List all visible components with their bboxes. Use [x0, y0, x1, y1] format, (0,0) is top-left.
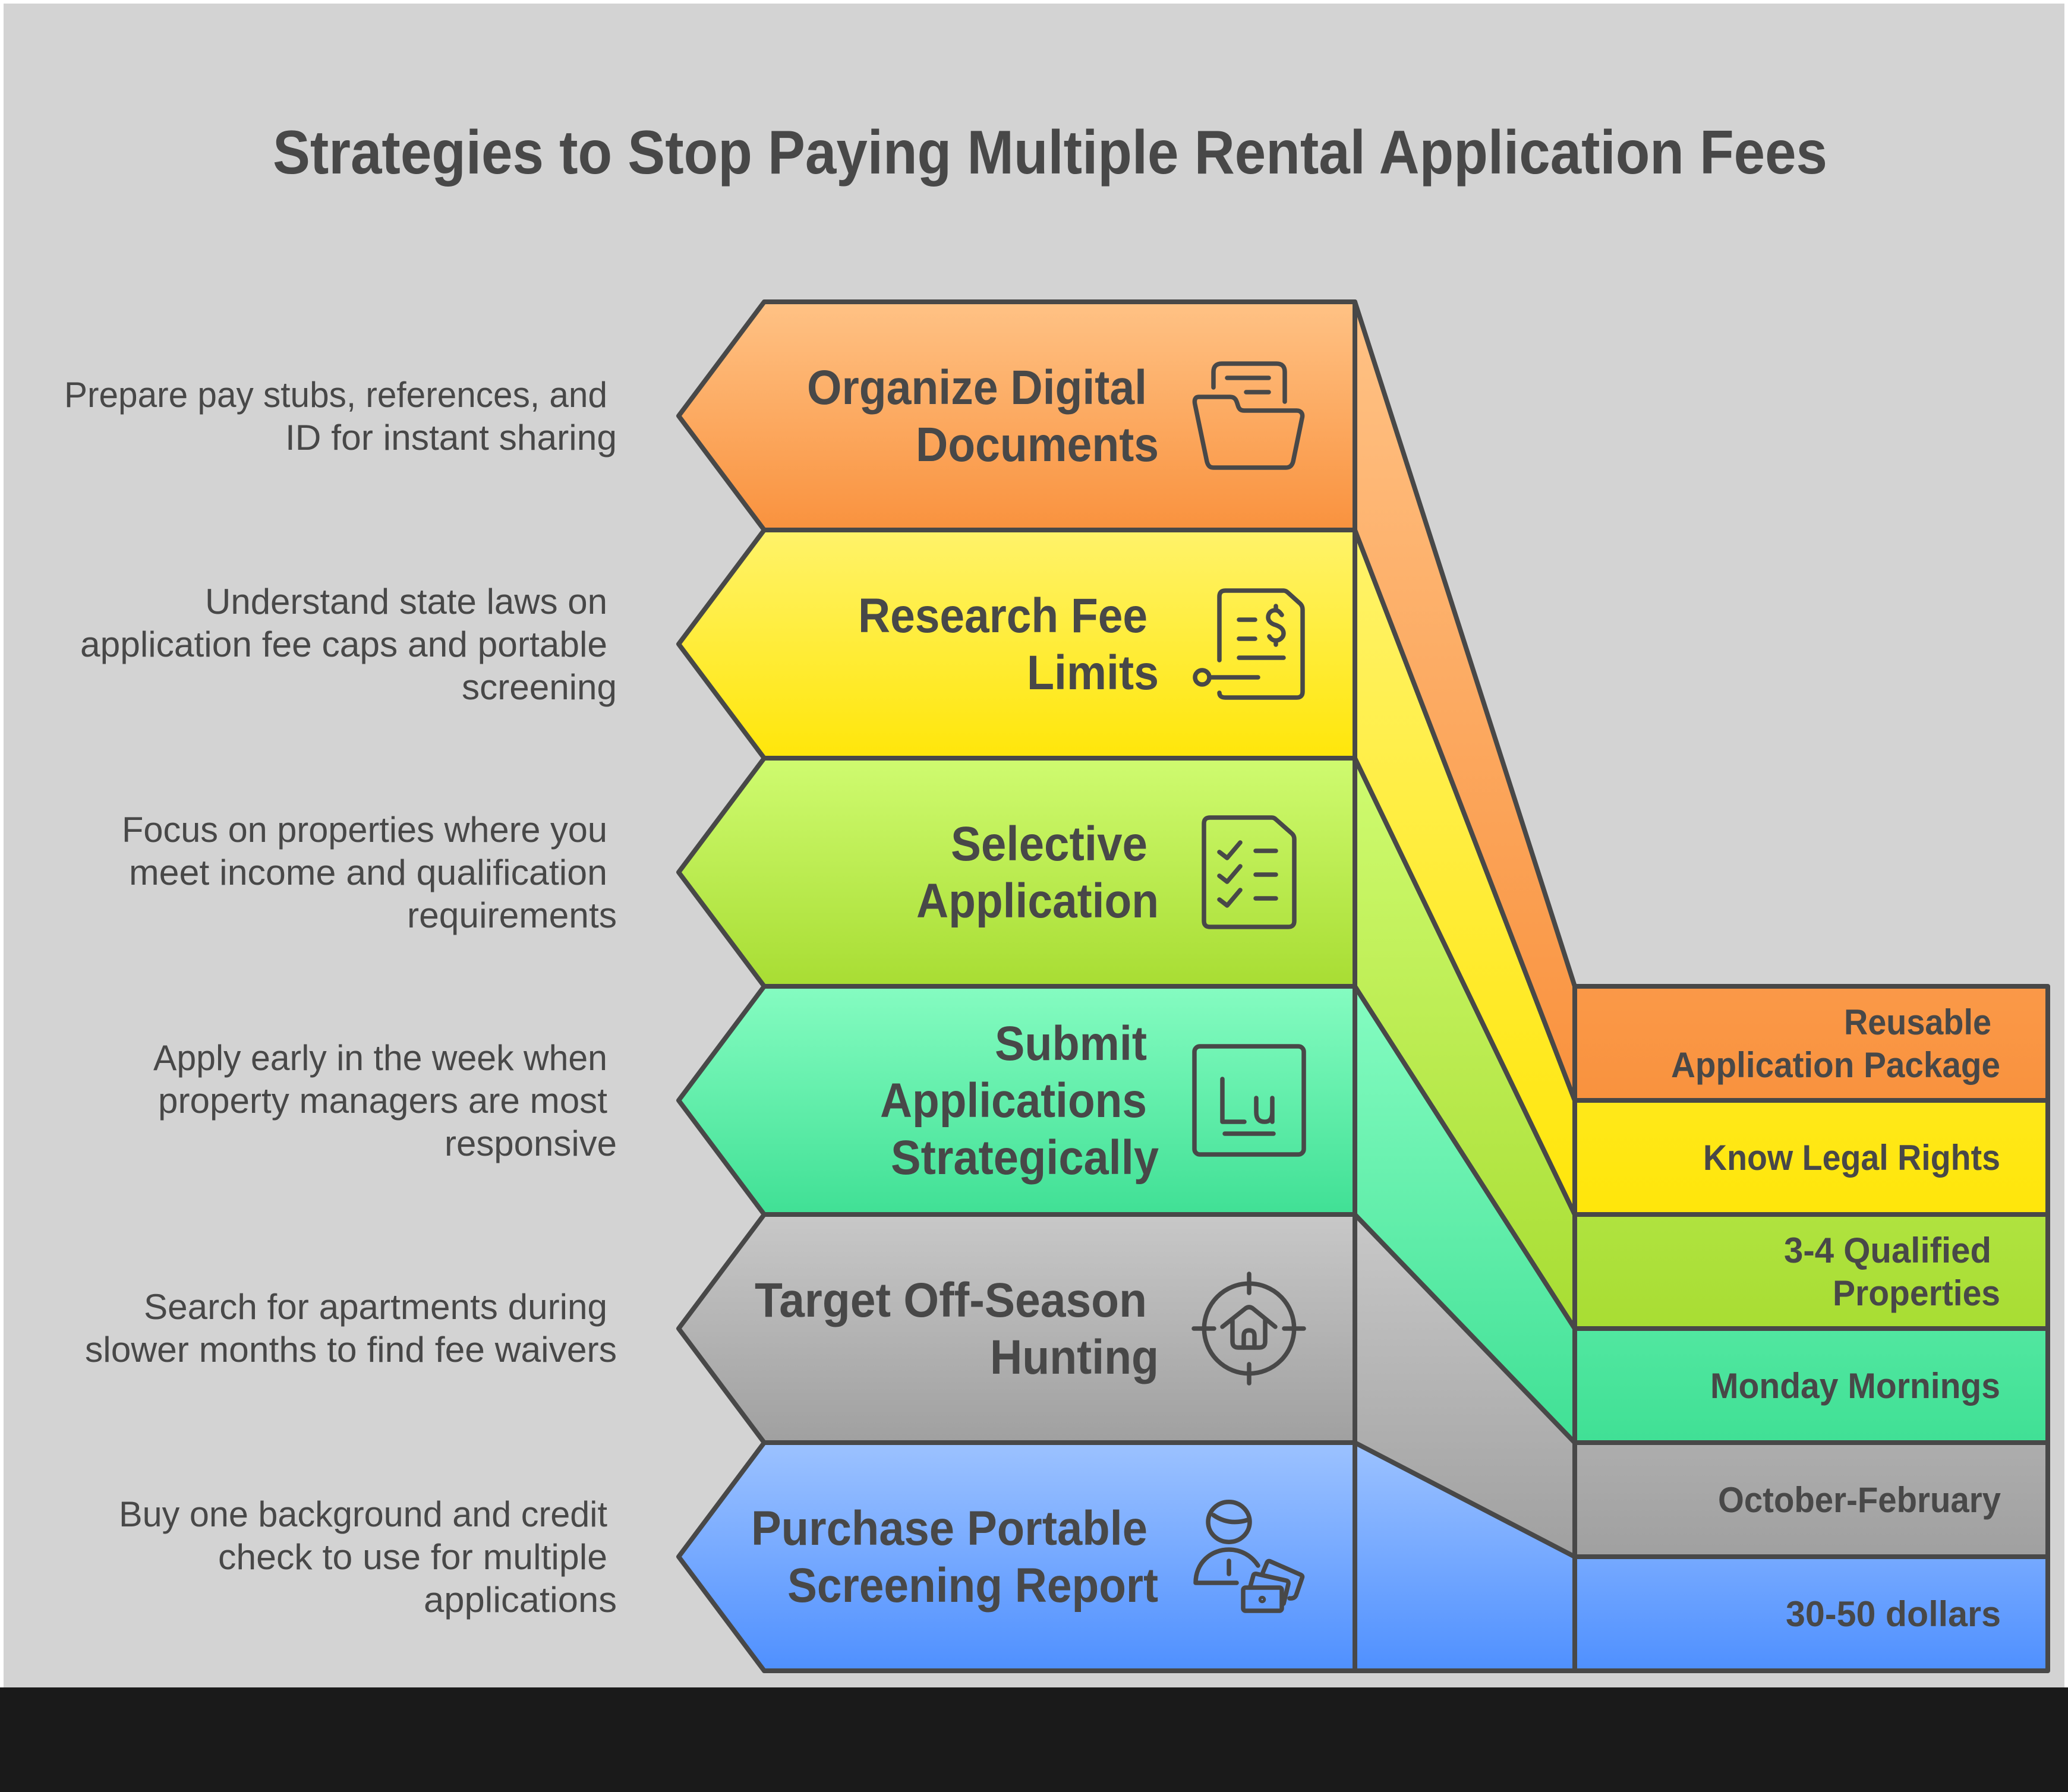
connector and box: Reusable Application Package [1355, 302, 2048, 1100]
arrow band [679, 302, 1355, 530]
icon: fee document [1195, 591, 1303, 698]
description 3: meet income and qualification [129, 853, 607, 892]
panel: strategy 4 [679, 986, 1355, 1214]
description 3: Focus on properties where you [122, 810, 607, 850]
outcome label: 3-4 Qualified Properties: 3-4 Qualified [1784, 1231, 1991, 1270]
description 5: Search for apartments during [144, 1287, 607, 1327]
heading [880, 1017, 1159, 1185]
description 2 [80, 582, 617, 707]
heading [751, 1501, 1158, 1613]
description 6: check to use for multiple [218, 1537, 607, 1577]
description 6 [119, 1494, 617, 1620]
heading: Hunting [990, 1330, 1159, 1384]
description 3: requirements [407, 895, 617, 935]
arrow band [679, 1214, 1355, 1443]
arrow band [679, 758, 1355, 986]
description 4: responsive [445, 1124, 617, 1163]
heading: Submit [995, 1017, 1147, 1071]
heading: Screening Report [787, 1558, 1158, 1613]
description 6: Buy one background and credit [119, 1494, 607, 1534]
heading: Selective [951, 817, 1148, 871]
panel: strategy 3 [679, 758, 1355, 986]
arrow band [679, 1443, 1355, 1671]
vertical divider [1572, 986, 1577, 1671]
arrow band [679, 986, 1355, 1214]
description 4 [153, 1038, 617, 1163]
description 2: application fee caps and portable [80, 624, 607, 664]
description 2: screening [462, 667, 617, 707]
outcome label: Know Legal Rights: Know Legal Rights [1703, 1138, 2000, 1178]
heading: Application [916, 874, 1159, 928]
outcome label: Reusable Application Package [1671, 1002, 2000, 1085]
description 4: Apply early in the week when [153, 1038, 607, 1078]
heading [755, 1273, 1159, 1384]
connector and box: 30-50 dollars [1355, 1443, 2048, 1671]
heading: Target Off-Season [755, 1273, 1147, 1327]
outcome label: Reusable Application Package: Reusable [1844, 1002, 1991, 1042]
connector and box: Know Legal Rights [1355, 530, 2048, 1214]
outcome label: 3-4 Qualified Properties: Properties [1833, 1273, 2000, 1313]
heading: Purchase Portable [751, 1501, 1148, 1556]
connector and box: October-February [1355, 1214, 2048, 1557]
icon: house in crosshair [1194, 1274, 1304, 1383]
description 6: applications [424, 1580, 617, 1620]
heading: Documents [916, 418, 1159, 472]
heading [916, 817, 1159, 928]
description 4: property managers are most [158, 1081, 607, 1121]
description 2: Understand state laws on [205, 582, 607, 621]
icon: checklist [1204, 818, 1294, 927]
icon: lettered tile [1194, 1046, 1304, 1154]
icon: person with cards [1196, 1502, 1303, 1611]
title: Strategies to Stop Paying Multiple Rental Application Fees [273, 118, 1827, 187]
panel: strategy 6 [679, 1443, 1355, 1671]
heading [807, 361, 1159, 472]
panel: strategy 1 [679, 302, 1355, 530]
description 3 [122, 810, 617, 935]
footer bar [0, 1687, 2068, 1792]
panel: strategy 2 [679, 530, 1355, 758]
description 1: Prepare pay stubs, references, and [64, 375, 607, 415]
outcome label: 3-4 Qualified Properties [1784, 1231, 2000, 1313]
icon: folder with document [1194, 364, 1303, 468]
description 5: slower months to find fee waivers [85, 1330, 617, 1370]
heading: Research Fee [858, 589, 1148, 643]
outcome label: October-February: October-February [1718, 1480, 2001, 1520]
panel: strategy 5 [679, 1214, 1355, 1443]
heading: Limits [1027, 646, 1159, 700]
outcome label: 30-50 dollars: 30-50 dollars [1786, 1594, 2001, 1634]
description 5 [85, 1287, 617, 1370]
heading [858, 589, 1159, 700]
outcome label: Reusable Application Package: Application Package [1671, 1045, 2000, 1085]
connector and box: 3-4 Qualified Properties [1355, 758, 2048, 1329]
heading: Strategically [891, 1131, 1159, 1185]
arrow band [679, 530, 1355, 758]
description 1: ID for instant sharing [285, 418, 617, 458]
heading: Applications [880, 1074, 1147, 1128]
heading: Organize Digital [807, 361, 1147, 415]
description 1 [64, 375, 617, 458]
panel: connectors and outcome boxes [1355, 302, 2048, 1671]
connector and box: Monday Mornings [1355, 986, 2048, 1443]
outcome label: Monday Mornings: Monday Mornings [1710, 1366, 2000, 1406]
